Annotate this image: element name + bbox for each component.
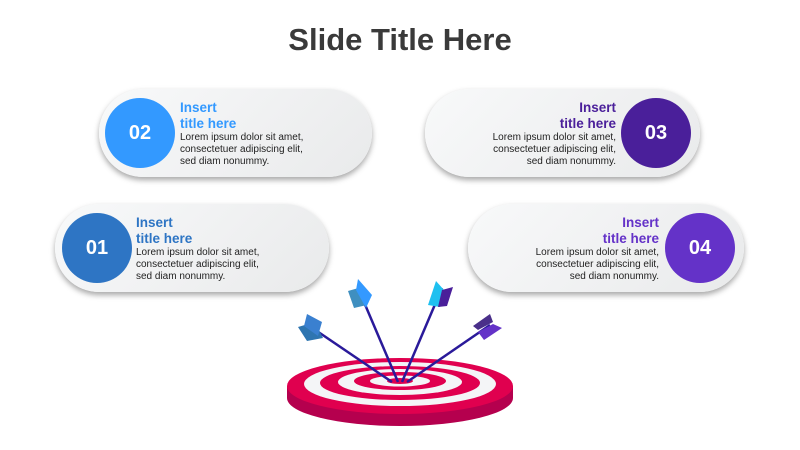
panel: 03 xyxy=(425,89,700,177)
text 01: title here xyxy=(136,231,192,246)
text 03: sed diam nonummy. xyxy=(527,156,616,167)
circle 02: 02 xyxy=(129,122,151,144)
text 04: sed diam nonummy. xyxy=(570,271,659,282)
text 01: consectetuer adipiscing elit, xyxy=(136,259,259,270)
circle 03: 03 xyxy=(645,122,667,144)
text 01: sed diam nonummy. xyxy=(136,271,225,282)
text 02: title here xyxy=(180,116,236,131)
title: Slide Title Here xyxy=(288,22,512,57)
target xyxy=(287,358,513,426)
circle 01: 01 xyxy=(86,237,108,259)
text 04: title here xyxy=(603,231,659,246)
text 03 xyxy=(493,100,616,167)
text 02: Lorem ipsum dolor sit amet, xyxy=(180,132,303,143)
fletchings xyxy=(298,279,502,341)
text 01: Insert xyxy=(136,215,173,230)
text 03: consectetuer adipiscing elit, xyxy=(493,144,616,155)
text 02: sed diam nonummy. xyxy=(180,156,269,167)
circle 03 xyxy=(621,98,691,168)
text 03: Lorem ipsum dolor sit amet, xyxy=(493,132,616,143)
text 02 xyxy=(180,100,303,167)
text 03: Insert xyxy=(579,100,616,115)
text 03: title here xyxy=(560,116,616,131)
arrows xyxy=(308,288,490,382)
panel: 01 xyxy=(55,204,329,292)
panel: 04 xyxy=(468,204,744,292)
circle 02 xyxy=(105,98,175,168)
circle 04: 04 xyxy=(689,237,711,259)
circle 01 xyxy=(62,213,132,283)
text 02: consectetuer adipiscing elit, xyxy=(180,144,303,155)
circle 04 xyxy=(665,213,735,283)
text 04 xyxy=(536,215,659,282)
text 01: Lorem ipsum dolor sit amet, xyxy=(136,247,259,258)
panel: 02 xyxy=(99,89,372,177)
text 02: Insert xyxy=(180,100,217,115)
text 04: Insert xyxy=(622,215,659,230)
text 01 xyxy=(136,215,259,282)
text 04: Lorem ipsum dolor sit amet, xyxy=(536,247,659,258)
text 04: consectetuer adipiscing elit, xyxy=(536,259,659,270)
